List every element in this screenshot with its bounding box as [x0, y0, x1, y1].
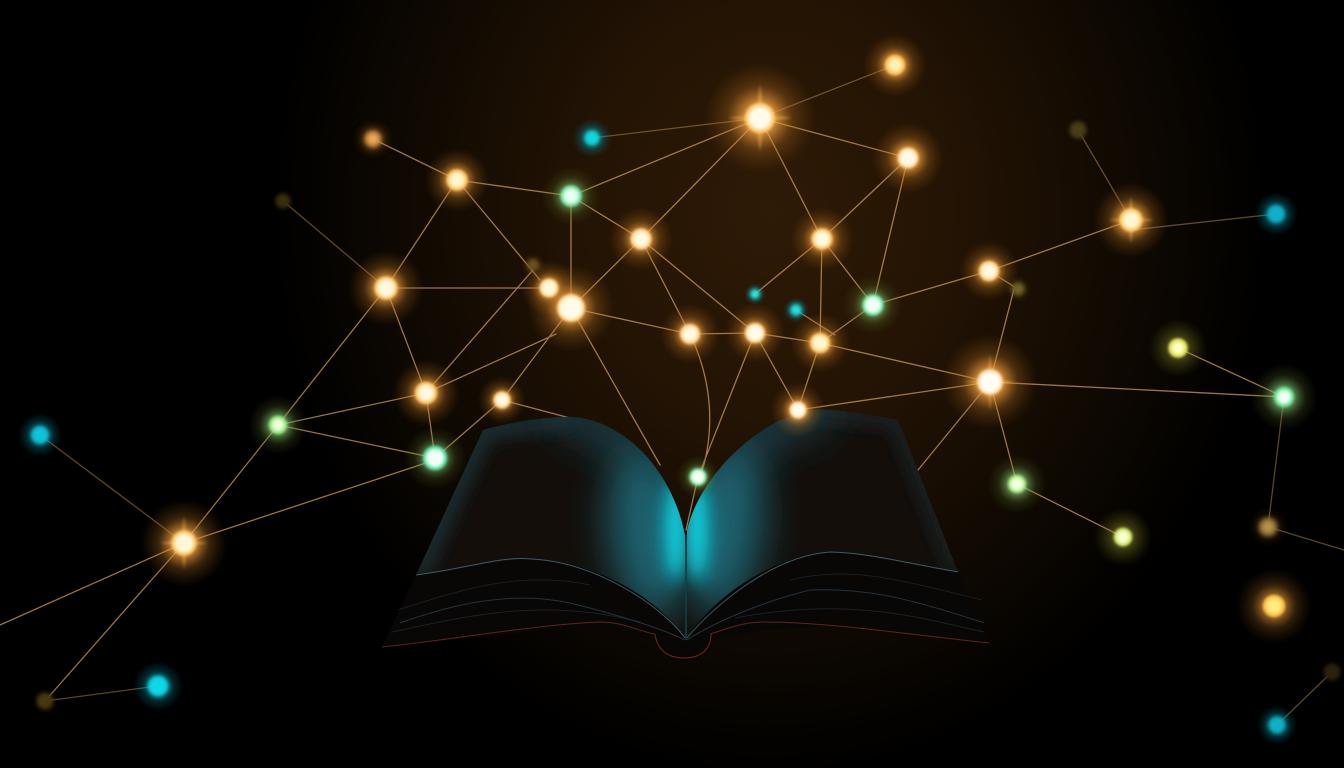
warm node halos — [140, 33, 1312, 644]
left teal glow — [599, 446, 697, 624]
page block — [382, 540, 989, 658]
right page teal rim — [812, 410, 958, 572]
left page teal rim — [416, 417, 575, 575]
red lower outline — [382, 622, 655, 647]
left cyan glow — [665, 478, 687, 582]
cyan node halos — [18, 118, 1298, 745]
page edge lines — [382, 552, 989, 658]
right teal glow — [675, 441, 773, 619]
left page — [416, 415, 697, 640]
green node cores — [269, 186, 1294, 546]
cyan node cores — [31, 130, 1286, 734]
warm node cores — [172, 55, 1285, 617]
network connection lines — [0, 118, 1284, 701]
open book — [382, 408, 989, 658]
green node halos — [248, 166, 1318, 567]
dim nodes — [36, 119, 1340, 710]
star glints — [160, 84, 1154, 570]
right page — [675, 408, 958, 640]
right cyan glow — [686, 478, 708, 582]
spine — [685, 535, 687, 640]
